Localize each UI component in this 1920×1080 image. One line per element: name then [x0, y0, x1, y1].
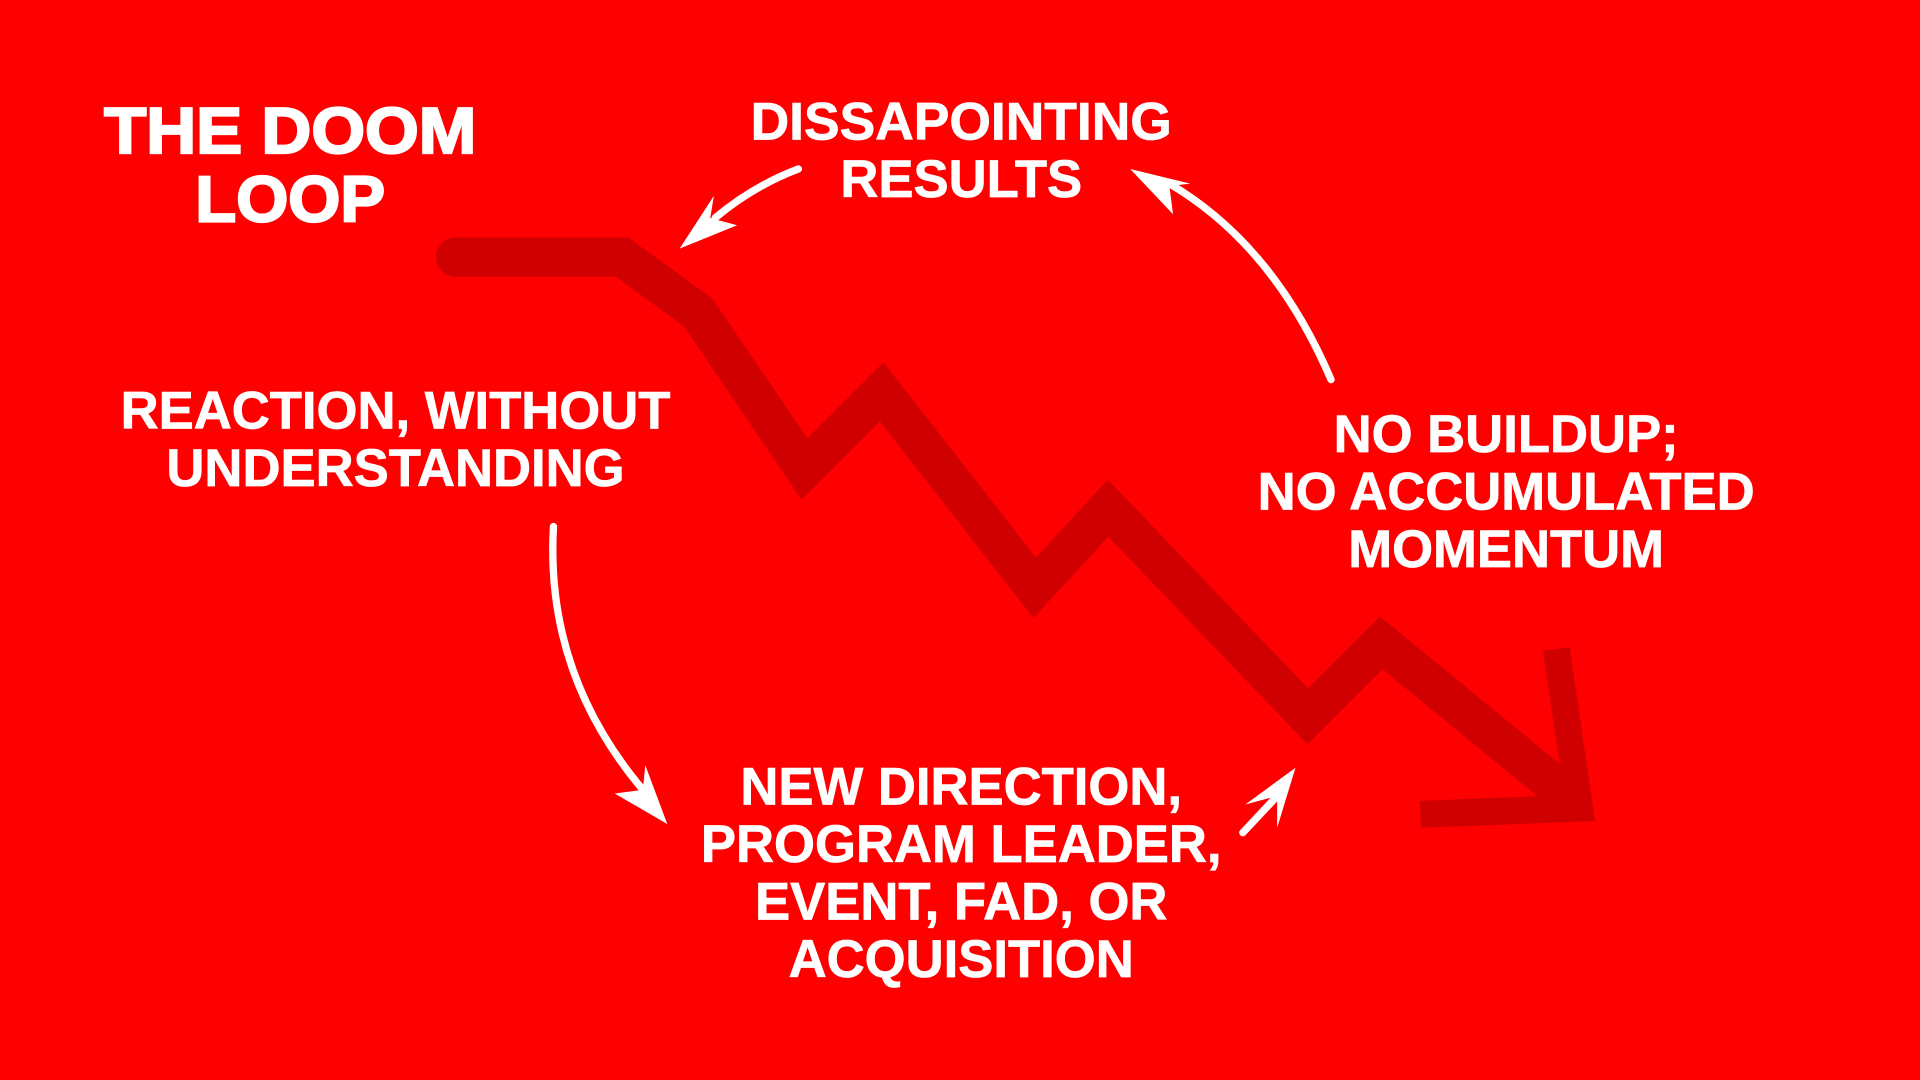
title: THE DOOM [104, 94, 476, 167]
text: no buildup: NO ACCUMULATED [1258, 462, 1755, 521]
text: new direction: NEW DIRECTION, [740, 757, 1182, 816]
text: reaction without understanding: REACTION, WITHOUT [121, 382, 670, 441]
text: reaction without understanding [121, 382, 670, 498]
arrow: new direction to buildup [1243, 768, 1296, 833]
text: dissapointing results: RESULTS [840, 150, 1082, 209]
title: LOOP [195, 163, 385, 236]
arrow: results to reaction [680, 169, 798, 249]
trend line: declining zigzag [456, 257, 1580, 814]
text: no buildup: NO BUILDUP; [1334, 405, 1679, 464]
text: new direction: ACQUISITION [789, 930, 1134, 989]
text: reaction without understanding: UNDERSTANDING [166, 439, 625, 498]
text: no buildup [1258, 405, 1755, 579]
text: no buildup: MOMENTUM [1348, 520, 1664, 579]
arrow: buildup to results [1130, 169, 1331, 380]
text: dissapointing results [751, 93, 1172, 209]
text: new direction: EVENT, FAD, OR [755, 873, 1167, 932]
text: new direction [701, 757, 1222, 989]
title [104, 94, 476, 236]
arrow: reaction to new direction [553, 527, 667, 824]
text: new direction: PROGRAM LEADER, [701, 815, 1222, 874]
text: dissapointing results: DISSAPOINTING [751, 93, 1172, 152]
